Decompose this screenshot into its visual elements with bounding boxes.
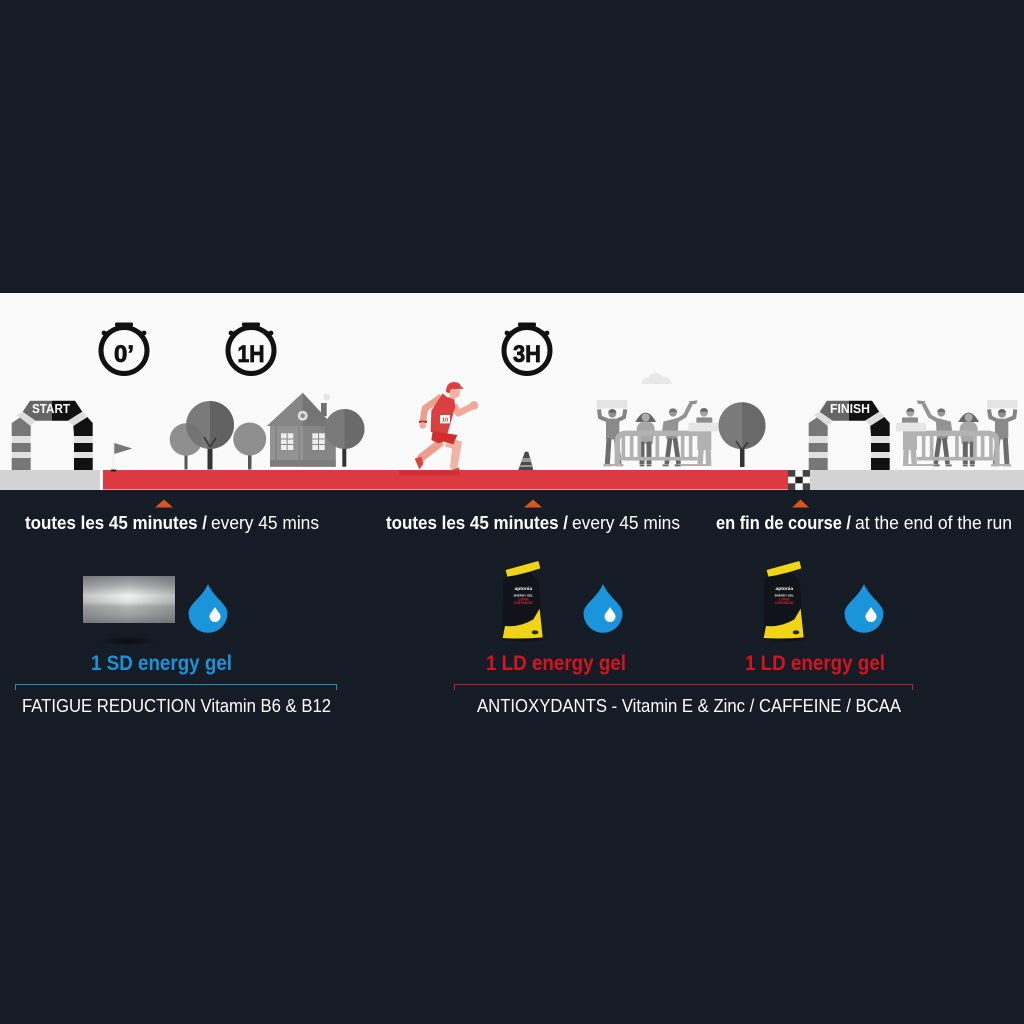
stopwatch: 3 hours xyxy=(504,322,550,374)
cloud xyxy=(642,373,672,384)
tree beside house xyxy=(324,409,364,467)
icon: start flag xyxy=(111,443,132,472)
checkered finish line xyxy=(788,470,810,490)
runner in red: 10 xyxy=(442,417,448,423)
tree before finish xyxy=(718,402,766,467)
metal placeholder plate for SD gel xyxy=(83,576,175,646)
timing text 1: every 45 mins xyxy=(211,513,319,533)
traffic cone xyxy=(518,452,533,470)
gel pack 1: aptonia xyxy=(514,586,532,592)
finish arch xyxy=(809,401,890,470)
timing marker 3 xyxy=(792,500,809,508)
trees near start xyxy=(170,401,266,470)
stopwatch: 0 minutes: 0’ xyxy=(114,341,134,368)
gel pack 1: DISTANCE xyxy=(514,601,533,605)
crowd after finish xyxy=(896,400,1018,466)
gel pack 2 xyxy=(763,561,809,642)
timing text 2 xyxy=(386,513,680,533)
finish arch: FINISH xyxy=(830,401,870,416)
stopwatch: 1 hour: 1H xyxy=(238,341,264,368)
house xyxy=(267,393,336,467)
gel pack 2: DISTANCE xyxy=(775,601,794,605)
gel pack 1: LONG xyxy=(518,598,529,602)
timing text 1 xyxy=(25,513,319,533)
icon: water drop 2 xyxy=(584,584,622,633)
gel pack 1 xyxy=(502,561,548,642)
text: LD gel benefits: ANTIOXYDANTS - Vitamin E & Zinc / CAFFEINE / BCAA xyxy=(477,696,901,716)
runner in red xyxy=(399,382,478,475)
bracket: LD gel benefits xyxy=(454,684,912,690)
timing marker 1 xyxy=(155,500,173,508)
timing marker 2 xyxy=(524,500,542,508)
label: 1 LD energy gel second: 1 LD energy gel xyxy=(745,652,885,675)
label: 1 LD energy gel first: 1 LD energy gel xyxy=(486,652,626,675)
icon: water drop 1 xyxy=(188,584,228,633)
bracket: SD gel benefits xyxy=(16,684,336,690)
stopwatch: 3 hours: 3H xyxy=(513,341,541,368)
stopwatch: 0 minutes xyxy=(101,322,147,374)
road track xyxy=(0,470,1024,490)
timing text 1: toutes les 45 minutes / xyxy=(25,513,207,533)
timing text 3: en fin de course / xyxy=(716,513,851,533)
timing text 3 xyxy=(716,513,1012,533)
gel pack 2: LONG xyxy=(779,598,790,602)
gel pack 2: aptonia xyxy=(775,586,793,592)
timing text 2: toutes les 45 minutes / xyxy=(386,513,568,533)
timing text 3: at the end of the run xyxy=(855,513,1012,533)
panel: white race scene band xyxy=(0,293,1024,490)
gel pack 1: ENERGY GEL xyxy=(514,594,533,598)
label: 1 SD energy gel: 1 SD energy gel xyxy=(91,652,232,675)
stopwatch: 1 hour xyxy=(228,322,274,374)
start arch: START xyxy=(32,401,70,416)
crowd at barrier before finish xyxy=(597,400,718,466)
icon: water drop 3 xyxy=(844,584,884,633)
text: SD gel benefits: FATIGUE REDUCTION Vitamin B6 & B12 xyxy=(22,696,331,716)
timing text 2: every 45 mins xyxy=(572,513,680,533)
gel pack 2: ENERGY GEL xyxy=(775,594,794,598)
start arch xyxy=(12,401,93,470)
